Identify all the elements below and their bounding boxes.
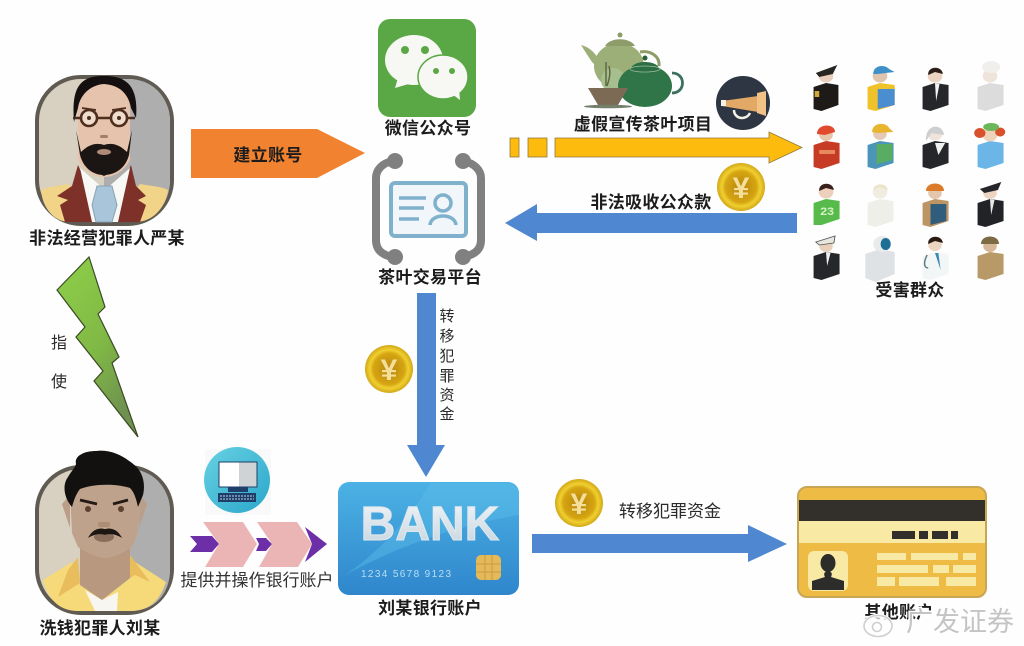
avatar: captain: [814, 236, 840, 280]
watermark: Weibo GF Securities: 广发证券: [906, 607, 1014, 637]
arrow: illegal fundraising: [505, 204, 797, 241]
label: illegal fundraising: 非法吸收公众款: [590, 193, 712, 212]
label: suspect Liu: 洗钱犯罪人刘某: [39, 618, 161, 638]
icon: other account card: [798, 487, 986, 597]
avatar: chef: [978, 61, 1004, 111]
avatar: builder: [868, 124, 894, 169]
avatar: astronaut: [865, 236, 895, 282]
avatar: judge: [923, 127, 949, 169]
avatar: chauffeur: [978, 182, 1004, 227]
avatar: police: [814, 65, 838, 111]
label: Liu bank account: 刘某银行账户: [378, 598, 482, 618]
avatar: doctor: [923, 237, 949, 280]
icon: bank card: [338, 482, 519, 595]
icon: yuan coin upper: [717, 163, 765, 211]
label: transfer funds vertical: [439, 308, 455, 423]
arrow: to other account: [532, 525, 787, 562]
label: victims: 受害群众: [875, 280, 945, 300]
label: instigate 2: 使: [51, 373, 67, 391]
icon: yuan coin lower: [555, 479, 603, 527]
label: transfer funds horizontal: 转移犯罪资金: [619, 502, 721, 521]
arrow: establish account: 建立账号: [233, 145, 303, 165]
group: victim avatars: [814, 61, 1005, 282]
avatar: faded doctor: [868, 184, 894, 227]
avatar: soldier: [978, 236, 1004, 280]
icon: computer: [204, 447, 271, 515]
label: other account: 其他账户: [864, 602, 934, 622]
label: WeChat official account: 微信公众号: [385, 119, 471, 138]
lightning bolt: [57, 257, 138, 437]
label: fake tea promotion: 虚假宣传茶叶项目: [574, 114, 712, 134]
icon: yuan coin upper: ¥: [733, 172, 750, 205]
label: transfer funds vertical: 移: [439, 328, 455, 345]
portrait: suspect Liu: [37, 451, 172, 613]
label: tea trading platform: 茶叶交易平台: [378, 267, 482, 287]
icon: yuan coin middle: [365, 345, 413, 393]
icon: bank card: BANK: [361, 498, 500, 551]
label: transfer funds vertical: 犯: [439, 348, 455, 365]
avatar: firefighter: [814, 125, 840, 169]
label: transfer funds vertical: 金: [439, 406, 455, 423]
avatar: worker blue: [868, 66, 895, 111]
arrow: down to bank: [407, 293, 445, 477]
arrow: chevrons provide bank account: [190, 522, 327, 567]
label: provide bank account: 提供并操作银行账户: [180, 571, 334, 590]
illustration: teapots: [581, 32, 682, 108]
icon: yuan coin middle: ¥: [381, 354, 398, 387]
avatar: clown: [974, 123, 1005, 169]
icon: megaphone: [716, 76, 770, 130]
icon: tea trading platform: [376, 153, 481, 265]
icon: yuan coin lower: ¥: [571, 488, 588, 521]
avatar: athlete: [814, 184, 840, 225]
label: transfer funds vertical: 转: [439, 308, 455, 325]
portrait: suspect Yan: [37, 76, 172, 224]
icon: WeChat: [378, 19, 476, 117]
avatar: suit: [923, 68, 949, 111]
icon: bank card: 1234 5678 9123: [361, 569, 451, 580]
label: transfer funds vertical: 罪: [439, 368, 455, 385]
label: instigate: 指: [51, 334, 67, 352]
avatar: miner: [923, 184, 949, 227]
arrow: establish account: [191, 129, 365, 178]
arrow: fake promotion: [510, 132, 802, 163]
avatar: athlete: 23: [820, 206, 835, 218]
label: transfer funds vertical: 资: [439, 387, 455, 404]
label: suspect Yan: 非法经营犯罪人严某: [29, 228, 185, 248]
